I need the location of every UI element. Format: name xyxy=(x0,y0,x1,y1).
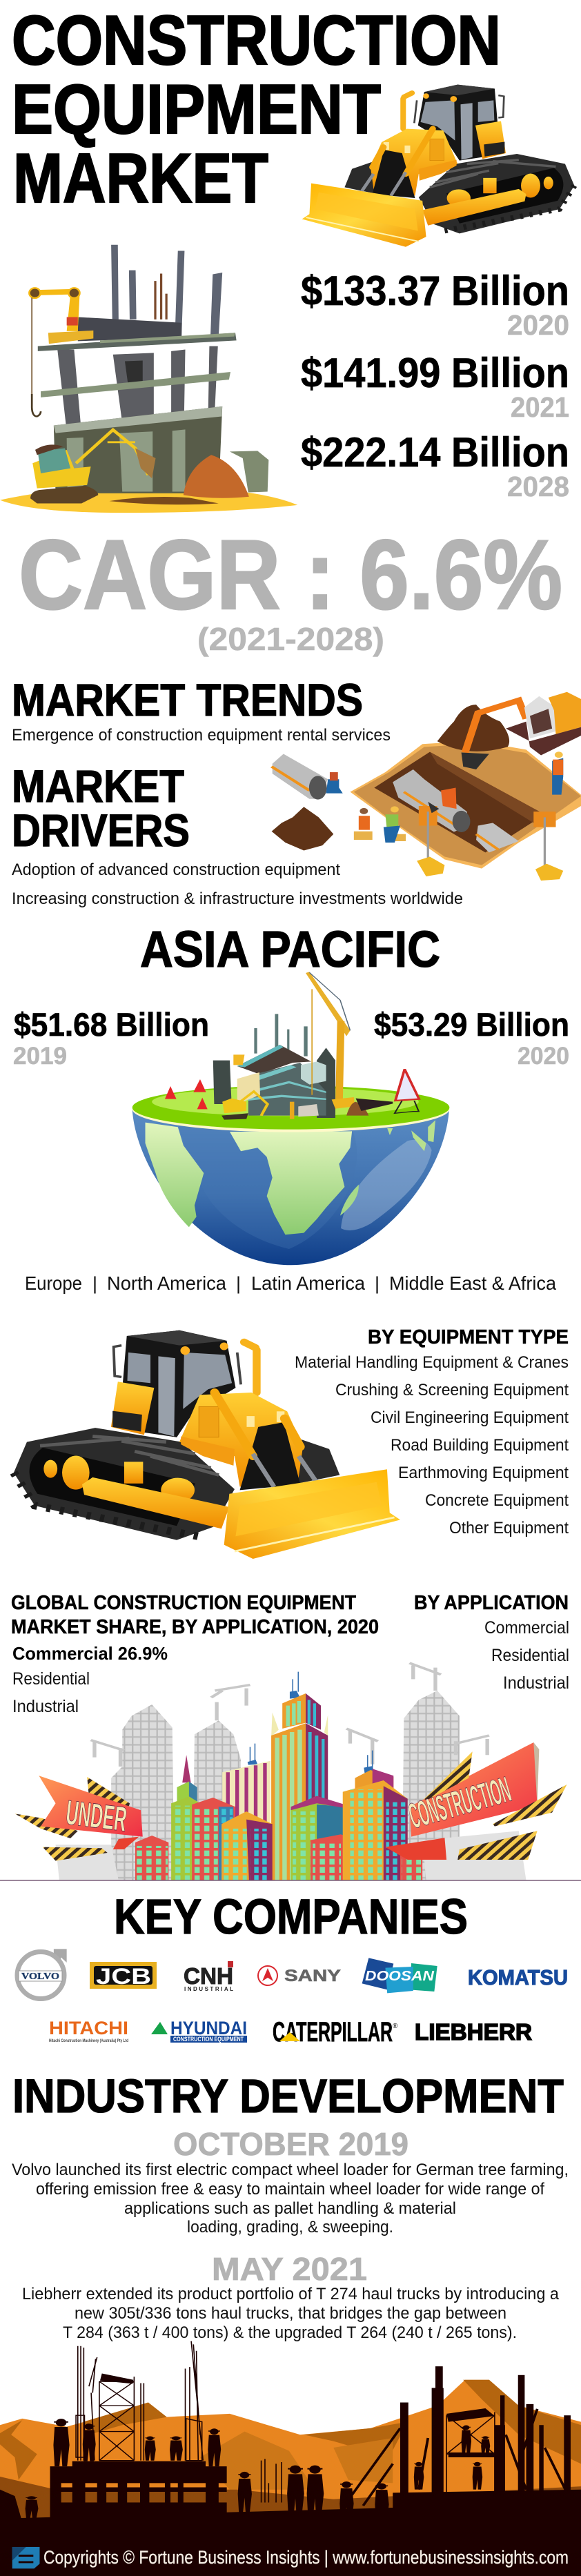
footer logo xyxy=(12,2547,39,2568)
logo: Doosan: DOOSAN xyxy=(365,1969,435,1984)
CAGR: (2021-2028) xyxy=(197,621,384,657)
logo: Doosan xyxy=(362,1958,437,1993)
logo: Volvo: VOLVO xyxy=(21,1972,59,1982)
heading: key companies: KEY COMPANIES xyxy=(114,1890,468,1945)
development: October 2019: OCTOBER 2019 xyxy=(173,2126,408,2162)
other regions list: North America xyxy=(107,1272,226,1294)
logo: JCB xyxy=(90,1962,157,1989)
market size values: $141.99 Billion xyxy=(301,350,569,396)
market drivers: MARKET xyxy=(12,760,184,812)
logo: Hitachi: HITACHI xyxy=(49,2018,128,2038)
logo: Caterpillar: CATERPILLAR xyxy=(273,2017,393,2047)
global market share text: GLOBAL CONSTRUCTION EQUIPMENT xyxy=(11,1592,356,1614)
by equipment type list: BY EQUIPMENT TYPE xyxy=(368,1326,569,1348)
other regions list: Middle East & Africa xyxy=(389,1272,556,1294)
other regions list xyxy=(25,1272,556,1294)
development: May 2021 xyxy=(22,2251,560,2342)
logo: Hyundai xyxy=(151,2018,247,2043)
logo: Liebherr: LIEBHERR xyxy=(415,2019,532,2045)
illustration: half globe with construction site xyxy=(132,972,449,1265)
regional values: 2020 xyxy=(518,1043,569,1070)
market drivers: Adoption of advanced construction equipment xyxy=(12,861,340,879)
illustration: colourful city under construction xyxy=(0,1663,581,1880)
title xyxy=(12,2,501,217)
market drivers: Increasing construction & infrastructure investments worldwide xyxy=(12,889,463,908)
by equipment type list: Civil Engineering Equipment xyxy=(371,1408,569,1427)
market trends: Emergence of construction equipment rental services xyxy=(12,726,391,745)
market trends: MARKET TRENDS xyxy=(12,674,363,725)
market size values xyxy=(301,268,569,502)
by equipment type list: Crushing & Screening Equipment xyxy=(335,1381,569,1399)
development: May 2021: T 284 (363 t / 400 tons) & the upgraded T 264 (240 t / 265 tons). xyxy=(63,2323,517,2342)
development: October 2019: applications such as pallet handling & material xyxy=(124,2199,456,2218)
logo: JCB: JCB xyxy=(96,1964,151,1989)
other regions list: Latin America xyxy=(251,1272,365,1294)
logo: CNH Industrial: CNH xyxy=(184,1963,233,1989)
icon: large bulldozer xyxy=(14,1330,400,1559)
market size values: 2021 xyxy=(511,391,569,423)
heading: Asia Pacific: ASIA PACIFIC xyxy=(140,921,440,978)
by equipment type list: Earthmoving Equipment xyxy=(398,1464,569,1482)
development: May 2021: MAY 2021 xyxy=(212,2251,367,2287)
market drivers xyxy=(12,760,463,908)
other regions list: | xyxy=(236,1273,241,1294)
global market share text: Industrial xyxy=(12,1697,79,1716)
market size values: 2028 xyxy=(507,471,569,502)
title: EQUIPMENT xyxy=(12,71,381,148)
illustration: construction site silhouette xyxy=(0,2341,581,2576)
global market share text: Commercial 26.9% xyxy=(12,1643,168,1664)
logo: Komatsu: KOMATSU xyxy=(468,1965,568,1989)
by application list: Industrial xyxy=(503,1673,569,1693)
title: CONSTRUCTION xyxy=(12,2,501,79)
development: October 2019: Volvo launched its first electric compact wheel loader for German tree farming, xyxy=(12,2161,569,2179)
logo: Hyundai: HYUNDAI xyxy=(170,2018,247,2038)
by equipment type list: Material Handling Equipment & Cranes xyxy=(295,1353,569,1372)
icon: bulldozer top right xyxy=(302,85,574,247)
development: October 2019 xyxy=(12,2126,569,2236)
market drivers: DRIVERS xyxy=(12,805,190,856)
development: May 2021: new 305t/336 tons haul trucks, that bridges the gap between xyxy=(75,2304,506,2323)
logo: Sany xyxy=(258,1966,341,1985)
logo: Hyundai: CONSTRUCTION EQUIPMENT xyxy=(173,2036,244,2043)
logo: Caterpillar: ® xyxy=(393,2023,398,2030)
development: October 2019: offering emission free & easy to maintain wheel loader for wide range of xyxy=(36,2180,544,2199)
market size values: $133.37 Billion xyxy=(301,268,569,314)
global market share text xyxy=(11,1592,379,1716)
by application list: BY APPLICATION xyxy=(414,1592,569,1614)
logo: Hitachi: Hitachi Construction Machinery (Australia) Pty Ltd xyxy=(49,2039,128,2043)
development: October 2019: loading, grading, & sweeping. xyxy=(187,2218,393,2236)
development: May 2021: Liebherr extended its product portfolio of T 274 haul trucks by introducing a xyxy=(22,2285,560,2303)
banner text: UNDER: UNDER xyxy=(64,1793,129,1839)
by application list xyxy=(414,1592,569,1693)
by equipment type list xyxy=(295,1326,569,1537)
by equipment type list: Concrete Equipment xyxy=(425,1491,569,1510)
other regions list: | xyxy=(375,1273,380,1294)
market size values: 2020 xyxy=(507,309,569,341)
other regions list: Europe xyxy=(25,1272,82,1294)
logo: Caterpillar xyxy=(273,2017,398,2047)
regional values: $51.68 Billion xyxy=(14,1006,209,1043)
regional values: 2019 xyxy=(13,1043,67,1070)
market size values: $222.14 Billion xyxy=(301,429,569,475)
by application list: Commercial xyxy=(484,1618,569,1638)
regional values: $53.29 Billion xyxy=(374,1006,569,1043)
global market share text: MARKET SHARE, BY APPLICATION, 2020 xyxy=(11,1616,379,1638)
by equipment type list: Road Building Equipment xyxy=(391,1436,569,1455)
global market share text: Residential xyxy=(12,1669,90,1689)
title: MARKET xyxy=(13,140,268,217)
logo: CNH Industrial: INDUSTRIAL xyxy=(184,1986,233,1992)
illustration: building under construction xyxy=(0,245,297,513)
by equipment type list: Other Equipment xyxy=(449,1519,569,1537)
logo: Volvo xyxy=(17,1949,67,1998)
other regions list: | xyxy=(92,1273,97,1294)
by application list: Residential xyxy=(491,1646,569,1665)
illustration: pipeline trench and excavator xyxy=(272,692,581,881)
logo: Sany: SANY xyxy=(284,1967,341,1985)
regional values xyxy=(13,1006,569,1070)
